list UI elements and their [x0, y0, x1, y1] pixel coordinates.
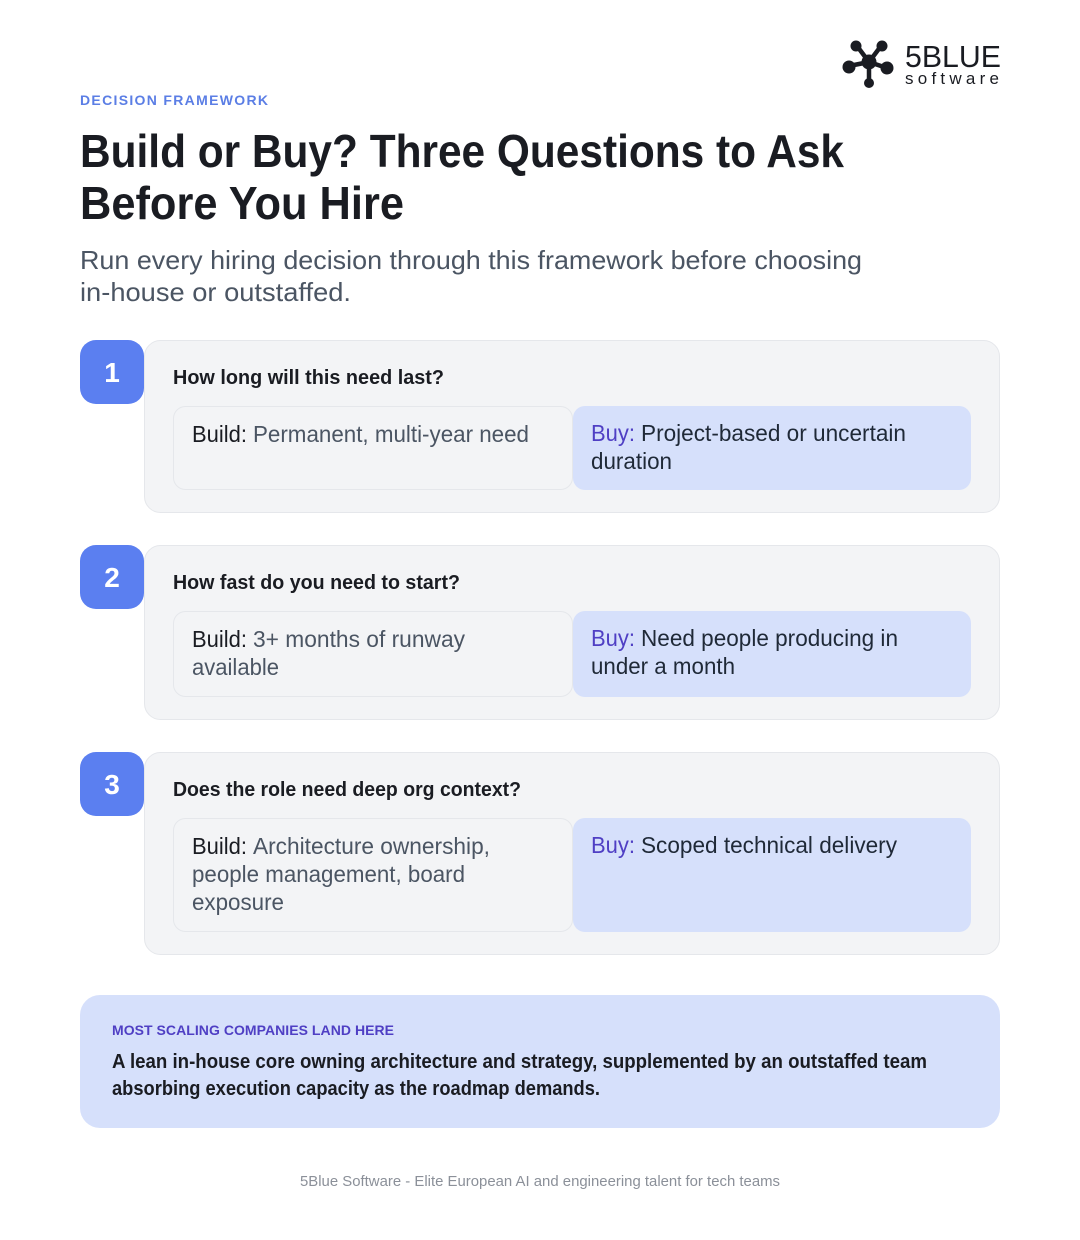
build option 2: 3+ months of runway [253, 626, 465, 652]
subtitle: Run every hiring decision through this framework before choosing [80, 245, 862, 275]
callout body [112, 1051, 927, 1100]
build option 3: exposure [192, 889, 284, 915]
footer: 5Blue Software - Elite European AI and engineering talent for tech teams [300, 1174, 780, 1190]
badge 3: 3 [104, 769, 120, 800]
callout body: A lean in-house core owning architecture and strategy, supplemented by an outstaffed team [112, 1051, 927, 1073]
callout label: MOST SCALING COMPANIES LAND HERE [112, 1022, 394, 1038]
build option 1: Permanent, multi-year need [253, 421, 529, 447]
build option 3: Architecture ownership, [253, 833, 490, 859]
build option 2 [174, 612, 572, 696]
badge 2 [80, 545, 144, 609]
buy option 2: under a month [591, 653, 735, 679]
callout body: absorbing execution capacity as the roadmap demands. [112, 1078, 600, 1100]
buy option 3: Buy: [591, 832, 635, 858]
question 1: How long will this need last? [173, 367, 444, 389]
title: Before You Hire [80, 177, 404, 229]
panel: question 1 [80, 340, 1000, 512]
build option 2: Build: [192, 626, 247, 652]
badge 1 [80, 340, 144, 404]
subtitle [80, 245, 862, 307]
buy option 2: Buy: [591, 625, 635, 651]
badge 3 [80, 752, 144, 816]
badge 1: 1 [104, 357, 120, 388]
logo subtitle: software [905, 69, 999, 88]
buy option 1: Buy: [591, 420, 635, 446]
title: Build or Buy? Three Questions to Ask [80, 125, 844, 177]
panel: question 3 [80, 752, 1000, 954]
eyebrow: DECISION FRAMEWORK [80, 92, 268, 108]
question 2: How fast do you need to start? [173, 572, 460, 594]
build option 1 [174, 406, 572, 490]
logo: 5Blue Software [842, 39, 1001, 88]
question 3: Does the role need deep org context? [173, 779, 521, 801]
badge 2: 2 [104, 562, 120, 593]
icon: molecule nodes [842, 40, 894, 88]
build option 3: people management, board [192, 861, 465, 887]
buy option 3: Scoped technical delivery [641, 832, 897, 858]
buy option 1: Project-based or uncertain [641, 420, 906, 446]
buy option 1: duration [591, 448, 672, 474]
panel: question 2 [80, 545, 1000, 720]
buy option 2 [573, 611, 971, 697]
build option 2: available [192, 654, 279, 680]
title [80, 125, 844, 229]
buy option 2: Need people producing in [641, 625, 898, 651]
logo wordmark: 5BLUE [905, 39, 1001, 74]
subtitle: in-house or outstaffed. [80, 277, 351, 307]
build option 1: Build: [192, 421, 247, 447]
build option 3 [174, 818, 572, 932]
build option 3: Build: [192, 833, 247, 859]
buy option 3 [573, 818, 971, 932]
callout [80, 995, 1000, 1128]
buy option 1 [573, 406, 971, 490]
